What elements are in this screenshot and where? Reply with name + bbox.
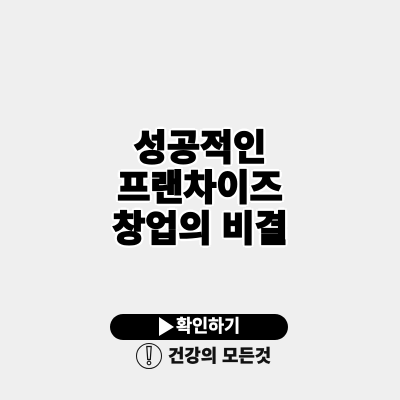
button label: 확인하기	[176, 316, 240, 336]
title line 3: 창업의 비결	[112, 208, 288, 249]
icon: exclamation circle	[136, 343, 162, 369]
button: confirm	[110, 314, 288, 340]
button icon: play triangle	[159, 317, 174, 336]
title line 2: 프랜차이즈	[117, 167, 283, 208]
title	[110, 126, 288, 249]
site name: 건강의 모든것	[168, 346, 271, 366]
title line 1: 성공적인	[134, 127, 266, 168]
